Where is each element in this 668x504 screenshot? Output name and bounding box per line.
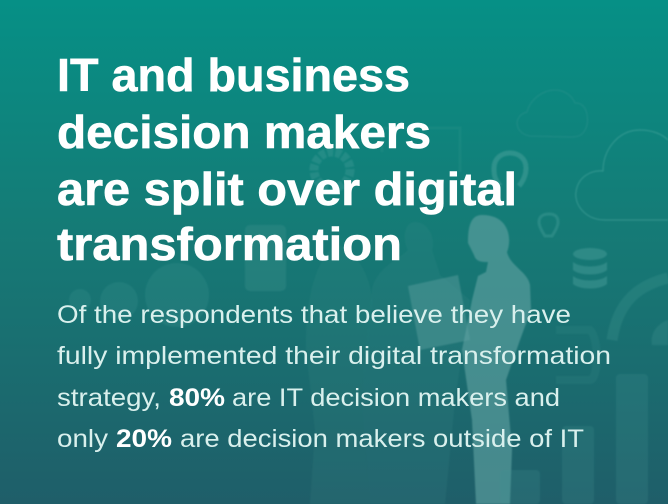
title [57,49,517,270]
silhouette: man with laptop [462,215,531,504]
icon: database [573,248,607,288]
body text [57,301,611,453]
body text: fully implemented their digital transformation [57,342,611,370]
silhouette: seated figure [362,222,470,504]
laptop [408,275,470,350]
body text: are IT decision makers and [232,384,560,412]
arc [612,278,668,340]
title: decision makers [57,106,431,158]
circles [69,263,209,327]
body text: only [57,425,109,453]
title: are split over digital [57,163,517,215]
body text: are decision makers outside of IT [180,425,584,453]
icon: gear [314,152,350,188]
icon: window outline [382,128,460,172]
body text: 80% [169,384,225,412]
icon: large cloud [576,130,668,220]
box [556,330,597,380]
body text: strategy, [57,384,161,412]
right arc [652,320,668,345]
icon: small cloud [517,90,588,137]
body text: Of the respondents that believe they have [57,301,571,329]
background illustration [69,90,668,504]
bar chart [500,374,648,504]
body text: 20% [116,425,172,453]
silhouette: left figure [306,245,372,504]
icon: small light bulb [539,214,558,236]
icon: phone [245,225,286,291]
title: IT and business [57,49,410,101]
title: transformation [57,218,402,270]
icon: large light bulb [494,153,526,186]
